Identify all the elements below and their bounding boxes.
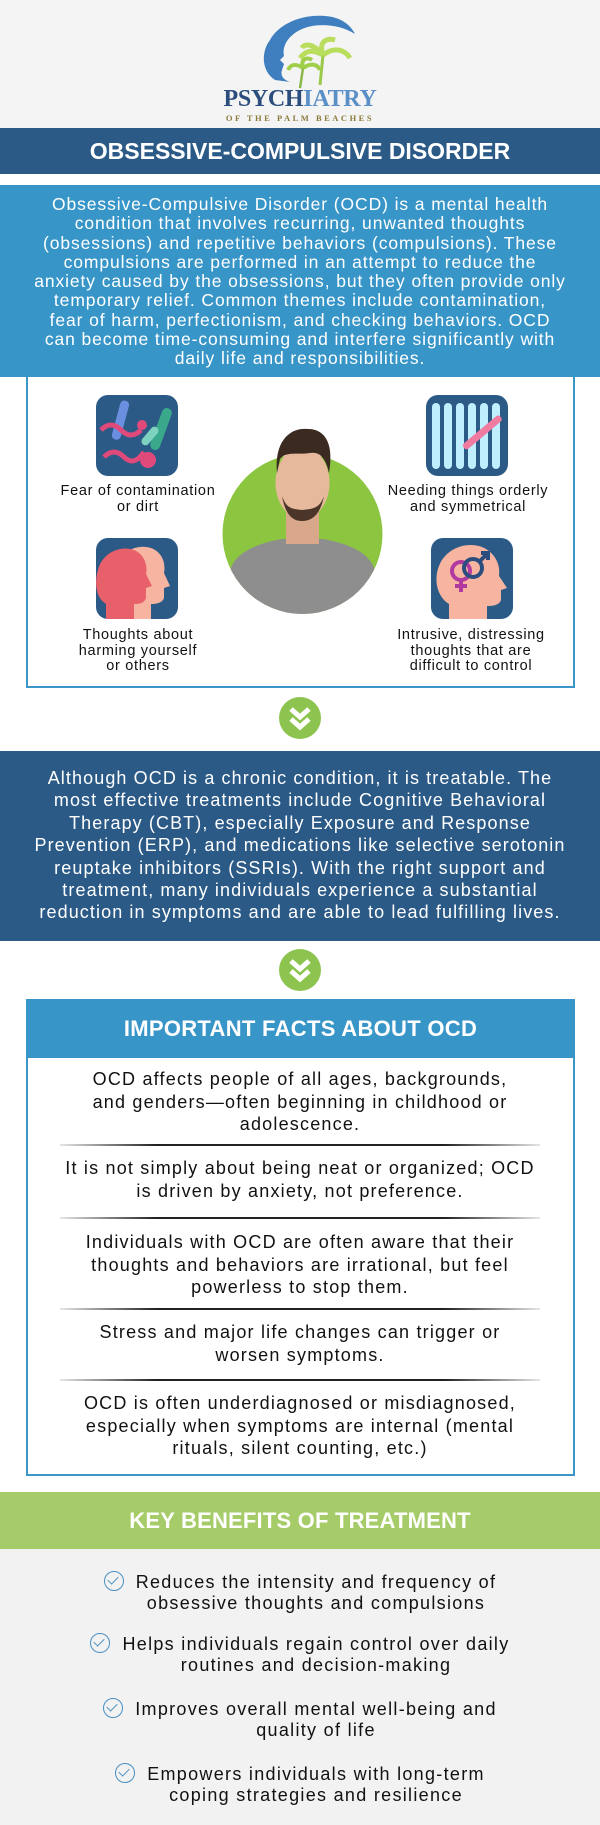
benefits heading xyxy=(0,1492,600,1549)
label: harming: Thoughts about xyxy=(83,627,193,643)
intro text block: compulsions are performed in an attempt to reduce the xyxy=(64,252,536,272)
panel: symptoms xyxy=(26,377,575,688)
label: intrusive: thoughts that are xyxy=(411,642,531,658)
icon: intrusive xyxy=(431,538,513,619)
label: contamination xyxy=(61,483,215,514)
title band: OBSESSIVE-COMPULSIVE DISORDER xyxy=(90,138,510,164)
label: orderly: Needing things orderly xyxy=(388,483,548,499)
treatment text block: Prevention (ERP), and medications like selective serotonin xyxy=(34,835,566,855)
fact 4: Stress and major life changes can trigger or xyxy=(100,1322,500,1342)
label: contamination: Fear of contamination xyxy=(61,483,215,499)
label: orderly: and symmetrical xyxy=(410,498,526,514)
label: intrusive: Intrusive, distressing xyxy=(397,627,545,643)
panel: important facts xyxy=(26,999,575,1476)
label: intrusive xyxy=(397,627,545,674)
benefit 2: routines and decision-making xyxy=(181,1655,451,1675)
benefit 4: coping strategies and resilience xyxy=(169,1785,463,1805)
icon: harming xyxy=(96,538,178,619)
fact 3: powerless to stop them. xyxy=(191,1277,409,1297)
label: contamination: or dirt xyxy=(117,498,159,514)
intro text block: condition that involves recurring, unwanted thoughts xyxy=(75,213,525,233)
benefit 3 xyxy=(103,1698,497,1740)
fact 2: It is not simply about being neat or organized; OCD xyxy=(65,1158,535,1178)
fact 5: rituals, silent counting, etc.) xyxy=(172,1438,428,1458)
icon: face arc xyxy=(264,16,355,82)
benefit 1 xyxy=(104,1571,496,1613)
label: orderly xyxy=(388,483,548,514)
intro text block: daily life and responsibilities. xyxy=(175,348,425,368)
intro text block: can become time-consuming and interfere significantly with xyxy=(45,329,555,349)
intro text block: (obsessions) and repetitive behaviors (compulsions). These xyxy=(43,233,557,253)
fact 2 xyxy=(65,1158,535,1201)
label: harming xyxy=(79,627,197,674)
fact 1: OCD affects people of all ages, backgrounds, xyxy=(93,1069,507,1089)
label: intrusive: difficult to control xyxy=(410,658,532,674)
intro text block: anxiety caused by the obsessions, but they often provide only xyxy=(34,271,566,291)
logo xyxy=(223,16,377,123)
treatment text block: reuptake inhibitors (SSRIs). With the right support and xyxy=(54,858,546,878)
intro text block: temporary relief. Common themes include contamination, xyxy=(54,290,546,310)
benefits panel xyxy=(0,1549,600,1825)
arrow: chevron 1 xyxy=(279,697,321,739)
fact 4: worsen symptoms. xyxy=(215,1344,385,1364)
fact 4 xyxy=(100,1322,500,1365)
icon: man portrait xyxy=(222,428,382,614)
benefit 1: obsessive thoughts and compulsions xyxy=(147,1593,485,1613)
fact 5 xyxy=(84,1393,516,1458)
benefit 3: quality of life xyxy=(256,1720,376,1740)
treatment text block xyxy=(0,751,600,941)
benefit 3: Improves overall mental well-being and xyxy=(135,1699,497,1719)
label: harming: harming yourself xyxy=(79,642,197,658)
fact 3: thoughts and behaviors are irrational, but feel xyxy=(91,1254,509,1274)
facts heading: IMPORTANT FACTS ABOUT OCD xyxy=(124,1016,477,1041)
fact 1: adolescence. xyxy=(240,1114,360,1134)
fact 3 xyxy=(86,1232,514,1297)
treatment text block: Although OCD is a chronic condition, it is treatable. The xyxy=(48,768,552,788)
benefit 2: Helps individuals regain control over daily xyxy=(122,1634,510,1654)
benefits heading: KEY BENEFITS OF TREATMENT xyxy=(129,1508,471,1533)
treatment text block: most effective treatments include Cognitive Behavioral xyxy=(54,790,546,810)
treatment text block: treatment, many individuals experience a substantial xyxy=(62,880,538,900)
treatment text block: Therapy (CBT), especially Exposure and Response xyxy=(69,813,531,833)
fact 5: OCD is often underdiagnosed or misdiagnosed, xyxy=(84,1393,516,1413)
logo text: PSYCHIATRY xyxy=(223,86,377,112)
facts heading xyxy=(26,999,575,1058)
fact 1 xyxy=(93,1069,507,1134)
icon: palms xyxy=(288,39,350,88)
benefit 4 xyxy=(115,1763,485,1805)
intro text block: Obsessive-Compulsive Disorder (OCD) is a mental health xyxy=(52,194,548,214)
header background xyxy=(0,0,600,128)
fact 1: and genders—often beginning in childhood or xyxy=(93,1092,507,1112)
fact 3: Individuals with OCD are often aware that their xyxy=(86,1232,514,1252)
label: harming: or others xyxy=(106,658,170,674)
benefit 4: Empowers individuals with long-term xyxy=(147,1764,485,1784)
icon: orderly xyxy=(426,395,508,476)
logo: OF THE PALM BEACHES xyxy=(226,113,374,123)
fact 2: is driven by anxiety, not preference. xyxy=(136,1180,464,1200)
arrow: chevron 2 xyxy=(279,949,321,991)
intro text block xyxy=(0,185,600,377)
fact 5: especially when symptoms are internal (mental xyxy=(86,1416,514,1436)
title band xyxy=(0,128,600,174)
icon: contamination xyxy=(96,395,178,476)
intro text block: fear of harm, perfectionism, and checking behaviors. OCD xyxy=(50,310,550,330)
treatment text block: reduction in symptoms and are able to lead fulfilling lives. xyxy=(39,902,561,922)
benefit 1: Reduces the intensity and frequency of xyxy=(136,1572,496,1592)
benefit 2 xyxy=(90,1633,510,1675)
